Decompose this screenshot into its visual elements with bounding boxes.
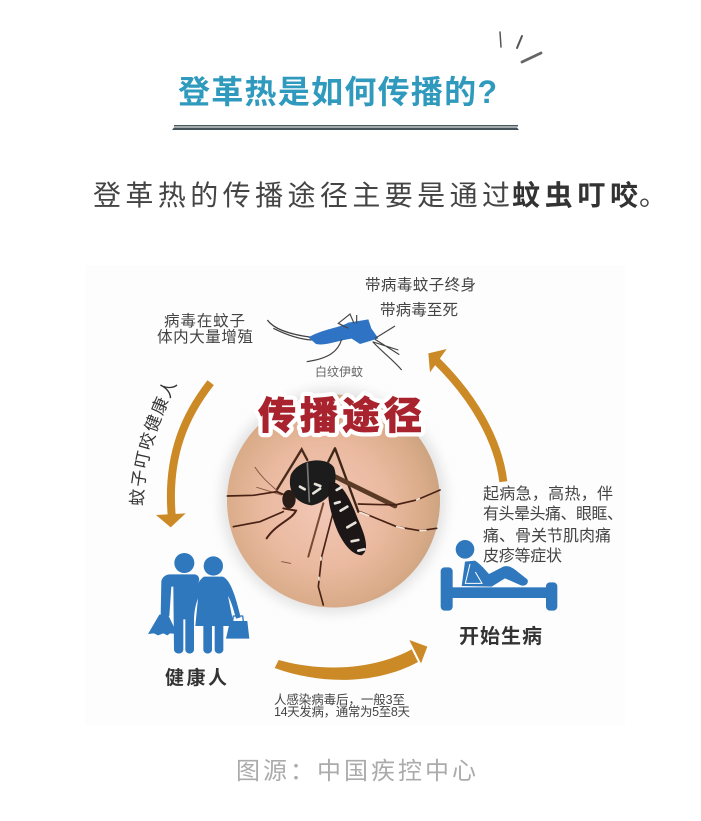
title: 登革热是如何传播的? [178,74,497,110]
title underline [172,125,519,130]
label: virus multiplies: 病毒在蚊子 [164,312,245,330]
label: starts getting sick: 开始生病 [459,625,542,648]
label: incubation text: 14天发病，通常为5至8天 [274,704,410,719]
central mosquito photo [222,389,446,613]
label: incubation text: 人感染病毒后，一般3至 [274,692,405,707]
label: carrier mosquito: 带病毒蚊子终身 [365,276,476,294]
label: white-striped mosquito: 白纹伊蚊 [315,364,363,379]
mosquito in photo [227,448,440,605]
heading: 传播途径: 传播途径 [258,395,422,438]
label: carrier mosquito [365,276,476,319]
label: symptoms: 皮疹等症状 [483,547,562,565]
panel: transmission diagram [128,276,623,719]
subtitle: 登革热的传播途径主要是通过 [93,180,510,211]
label: symptoms: 痛、骨关节肌肉痛 [483,527,611,545]
icon: healthy couple [148,553,249,653]
source caption: 图源：中国疾控中心 [236,758,476,785]
label: carrier mosquito: 带病毒至死 [380,301,458,319]
subtitle: 蚊虫叮咬 [512,180,638,211]
label: virus multiplies: 体内大量增殖 [157,328,253,346]
label: rotated bite text: 蚊子叮咬健康人 [128,384,178,506]
icon: blue mosquito [267,314,402,370]
label: symptoms: 有头晕头痛、眼眶、 [483,505,623,523]
label: symptoms: 起病急，高热，伴 [483,485,613,503]
label: symptoms [483,485,623,565]
arrow: bottom [275,640,427,680]
label: healthy person: 健康人 [165,666,227,689]
arrow: top right [428,349,503,482]
heading: 传播途径: 传播途径 [258,395,422,438]
arrow: left [156,383,211,527]
label: virus multiplies [157,312,253,346]
icon: patient in bed [441,540,557,611]
label: incubation text [274,692,410,719]
subtitle: 。 [639,180,667,211]
icon: accent strokes [500,32,541,62]
